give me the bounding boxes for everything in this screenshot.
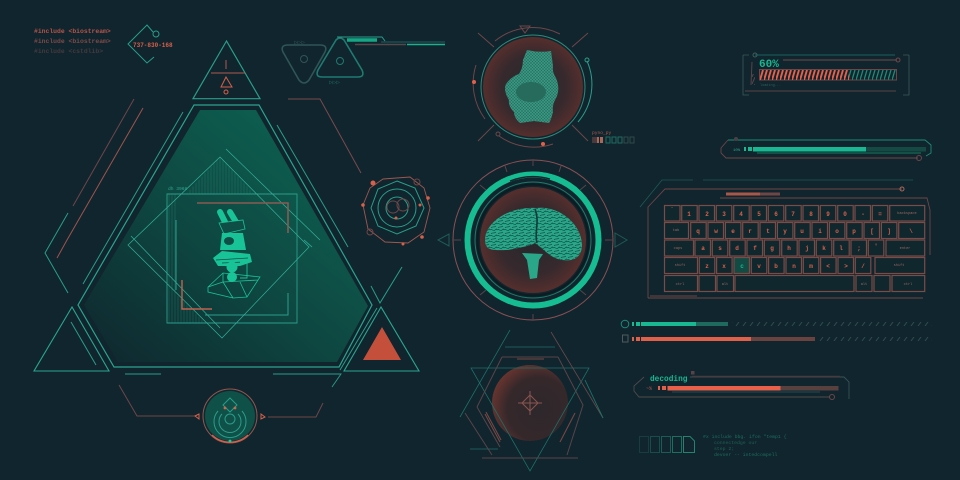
key labels: n bbox=[792, 263, 796, 270]
knee scan dial bbox=[472, 26, 634, 147]
key labels: shift bbox=[675, 263, 685, 268]
key labels: e bbox=[731, 228, 735, 235]
key labels: m bbox=[809, 263, 813, 270]
diamond code tag: 737-830-168 bbox=[133, 42, 173, 49]
key labels: z bbox=[705, 263, 709, 270]
trefoil badges: ▷▷▷ bbox=[294, 39, 305, 46]
progress panel 60 percent bbox=[743, 53, 909, 95]
key labels: w bbox=[714, 228, 718, 235]
key labels: enter bbox=[900, 246, 910, 251]
keyboard bbox=[640, 180, 930, 298]
key labels: o bbox=[835, 228, 839, 235]
progress panel 60 percent: loading... bbox=[760, 83, 781, 88]
key labels: r bbox=[748, 228, 752, 235]
key labels: tab bbox=[673, 228, 679, 233]
diamond code tag bbox=[128, 25, 173, 63]
green status line bbox=[621, 320, 932, 328]
icon: microscope bbox=[208, 212, 260, 298]
top connector lines bbox=[337, 37, 445, 44]
key labels: - bbox=[861, 211, 865, 218]
key labels: 7 bbox=[791, 211, 795, 218]
outer guide lines bbox=[45, 99, 402, 417]
key labels: 2 bbox=[705, 211, 709, 218]
key labels: ctrl bbox=[676, 282, 684, 287]
key labels: y bbox=[783, 228, 787, 235]
label: dh 3968 bbox=[168, 186, 188, 192]
header code text: #include <cstdlib> bbox=[34, 48, 103, 55]
key labels: b bbox=[774, 263, 778, 270]
key labels: i bbox=[818, 228, 822, 235]
key labels: ' bbox=[874, 243, 878, 250]
keyboard frame bbox=[640, 180, 913, 207]
key labels: / bbox=[861, 263, 865, 270]
key labels bbox=[670, 207, 917, 287]
key labels: backspace bbox=[897, 211, 917, 216]
key labels: ` bbox=[670, 207, 674, 214]
main hexagon panel bbox=[78, 105, 372, 367]
key labels: ctrl bbox=[904, 282, 912, 287]
key labels: ; bbox=[857, 245, 861, 252]
key labels: k bbox=[822, 245, 826, 252]
status blocks bbox=[592, 137, 634, 143]
trefoil badges bbox=[282, 38, 363, 86]
targeting hexagon widget bbox=[460, 330, 603, 471]
icon: brain bbox=[485, 208, 582, 279]
footnote code text bbox=[703, 434, 787, 458]
key labels: 6 bbox=[774, 211, 778, 218]
key labels: q bbox=[696, 228, 700, 235]
slim green progress bar: 10% bbox=[733, 149, 741, 153]
hatched progress bar bbox=[760, 70, 896, 80]
decoding progress panel bbox=[634, 371, 849, 400]
key labels: ] bbox=[887, 228, 891, 235]
header code text bbox=[34, 28, 111, 55]
red status line bbox=[622, 335, 932, 342]
key labels: v bbox=[757, 263, 761, 270]
key labels: < bbox=[826, 263, 830, 270]
status label: pyno_py bbox=[592, 131, 612, 136]
key labels: d bbox=[735, 245, 739, 252]
decoding progress panel: decoding bbox=[650, 376, 688, 384]
key labels: 1 bbox=[687, 211, 691, 218]
key labels: h bbox=[787, 245, 791, 252]
trefoil badges: ▷▷▷ bbox=[329, 79, 340, 86]
key labels: x bbox=[722, 263, 726, 270]
triangle lower left bbox=[34, 307, 109, 371]
decoding progress panel: ~% bbox=[646, 386, 652, 392]
key labels: alt bbox=[722, 282, 728, 287]
key labels: u bbox=[800, 228, 804, 235]
key labels: alt bbox=[861, 282, 867, 287]
key labels: l bbox=[839, 245, 843, 252]
footnote code text: #x include bbg. ifon "temp1 { bbox=[703, 434, 787, 440]
footnote code text: devoer -- intedcompell bbox=[714, 452, 777, 458]
key labels: c bbox=[740, 263, 744, 270]
key labels: j bbox=[805, 245, 809, 252]
header code text: #include <biostream> bbox=[34, 28, 111, 35]
small orbital dial bbox=[361, 177, 430, 246]
frame lines bbox=[128, 149, 320, 338]
key labels: p bbox=[852, 228, 856, 235]
key labels: 4 bbox=[739, 211, 743, 218]
icon: knee joint bbox=[505, 50, 558, 123]
key labels: s bbox=[718, 245, 722, 252]
key labels: f bbox=[753, 245, 757, 252]
key labels: > bbox=[844, 263, 848, 270]
key labels: 8 bbox=[809, 211, 813, 218]
key labels: = bbox=[878, 211, 882, 218]
key labels: \ bbox=[909, 228, 913, 235]
keys bbox=[664, 206, 925, 292]
key labels: 0 bbox=[843, 211, 847, 218]
key labels: shift bbox=[894, 263, 904, 268]
top triangle icon bbox=[193, 41, 260, 99]
key labels: g bbox=[770, 245, 774, 252]
footnote code text: connectedge our bbox=[714, 440, 757, 446]
percent label: 60% bbox=[759, 59, 779, 71]
slim green progress bar bbox=[721, 137, 931, 160]
key labels: 9 bbox=[826, 211, 830, 218]
key labels: a bbox=[701, 245, 705, 252]
key labels: 3 bbox=[722, 211, 726, 218]
brain scan dial bbox=[438, 160, 627, 320]
key labels: caps bbox=[674, 247, 682, 251]
header code text: #include <biostream> bbox=[34, 38, 111, 45]
hatched background bbox=[167, 157, 254, 323]
bottom radial badge bbox=[195, 389, 265, 443]
triangle lower right with red fill bbox=[344, 307, 419, 371]
key labels: t bbox=[766, 228, 770, 235]
footnote code text: step 2; bbox=[714, 446, 734, 452]
key labels: [ bbox=[870, 228, 874, 235]
document icons bbox=[640, 436, 694, 452]
key labels: 5 bbox=[757, 211, 761, 218]
